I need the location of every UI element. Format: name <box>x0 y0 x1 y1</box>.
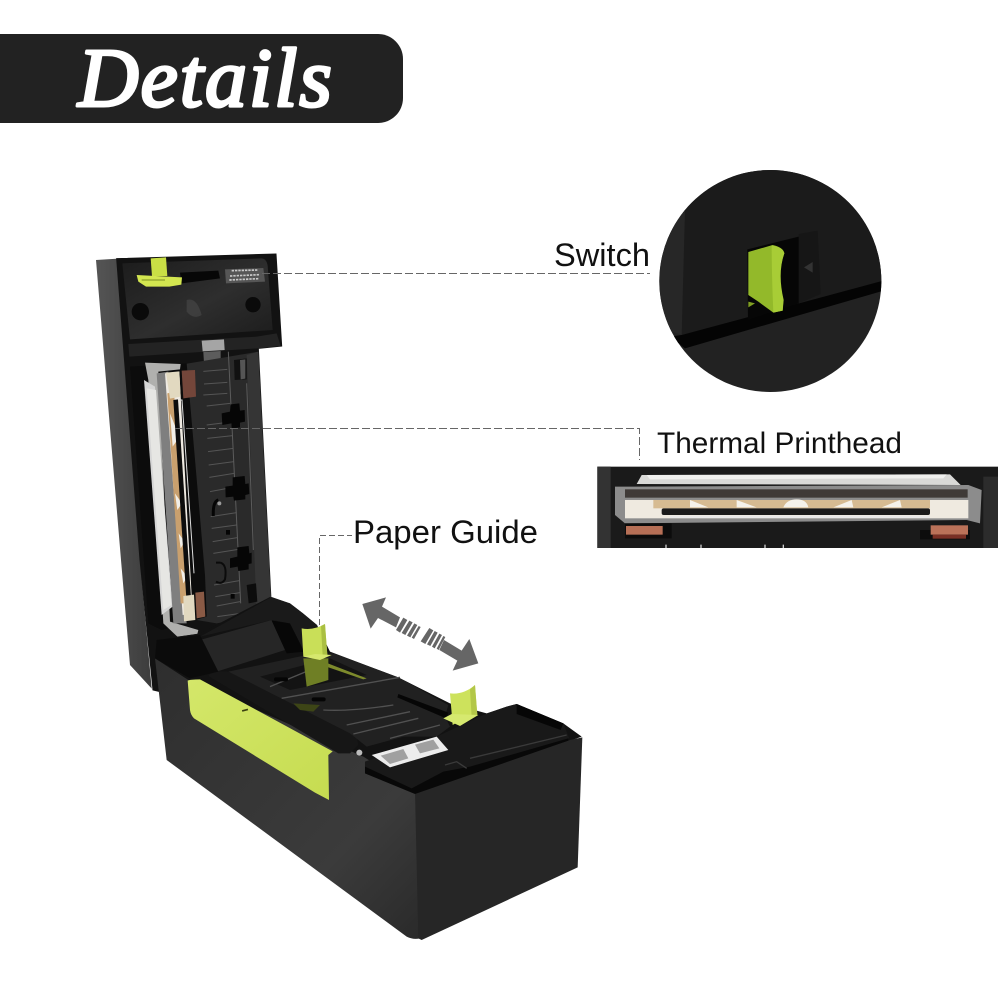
black head frame <box>130 363 207 630</box>
leader line: paper guide <box>320 536 352 625</box>
label: Paper Guide: Paper Guide <box>353 514 538 550</box>
base front body <box>155 658 420 939</box>
silver top bar <box>637 474 961 485</box>
lid top panel <box>122 258 273 339</box>
lid inner shell <box>117 254 282 691</box>
platen roller <box>200 620 285 672</box>
base right face <box>415 737 582 940</box>
black clips <box>222 403 245 429</box>
label: Thermal Printhead: Thermal Printhead <box>657 427 902 460</box>
label: Switch: Switch <box>554 237 650 273</box>
barcode label <box>372 737 448 767</box>
hinge bar <box>128 333 281 357</box>
black roller bar <box>208 671 358 753</box>
printer lid, opened <box>96 254 282 691</box>
title banner: Details <box>0 32 403 125</box>
title banner: Details: Details <box>77 32 332 125</box>
paper guide, front <box>443 685 478 726</box>
switch close-up circle <box>657 160 890 392</box>
paper tray <box>228 653 450 747</box>
rear cover corner <box>365 704 569 793</box>
thermal printhead in lid <box>144 363 205 637</box>
switch knob on lid <box>137 257 220 287</box>
lime front strip <box>188 679 333 800</box>
double arrow with stripes <box>362 597 478 671</box>
base rear black block <box>157 597 582 797</box>
leader line: thermal printhead <box>175 428 640 460</box>
leader line: switch <box>262 272 650 274</box>
thermal printhead close-up <box>597 467 998 548</box>
inner dark panel with ribs <box>185 352 272 623</box>
lid outer side <box>96 259 153 690</box>
green switch knob <box>748 245 784 313</box>
paper guide, rear <box>302 624 332 660</box>
printer base <box>155 597 582 940</box>
